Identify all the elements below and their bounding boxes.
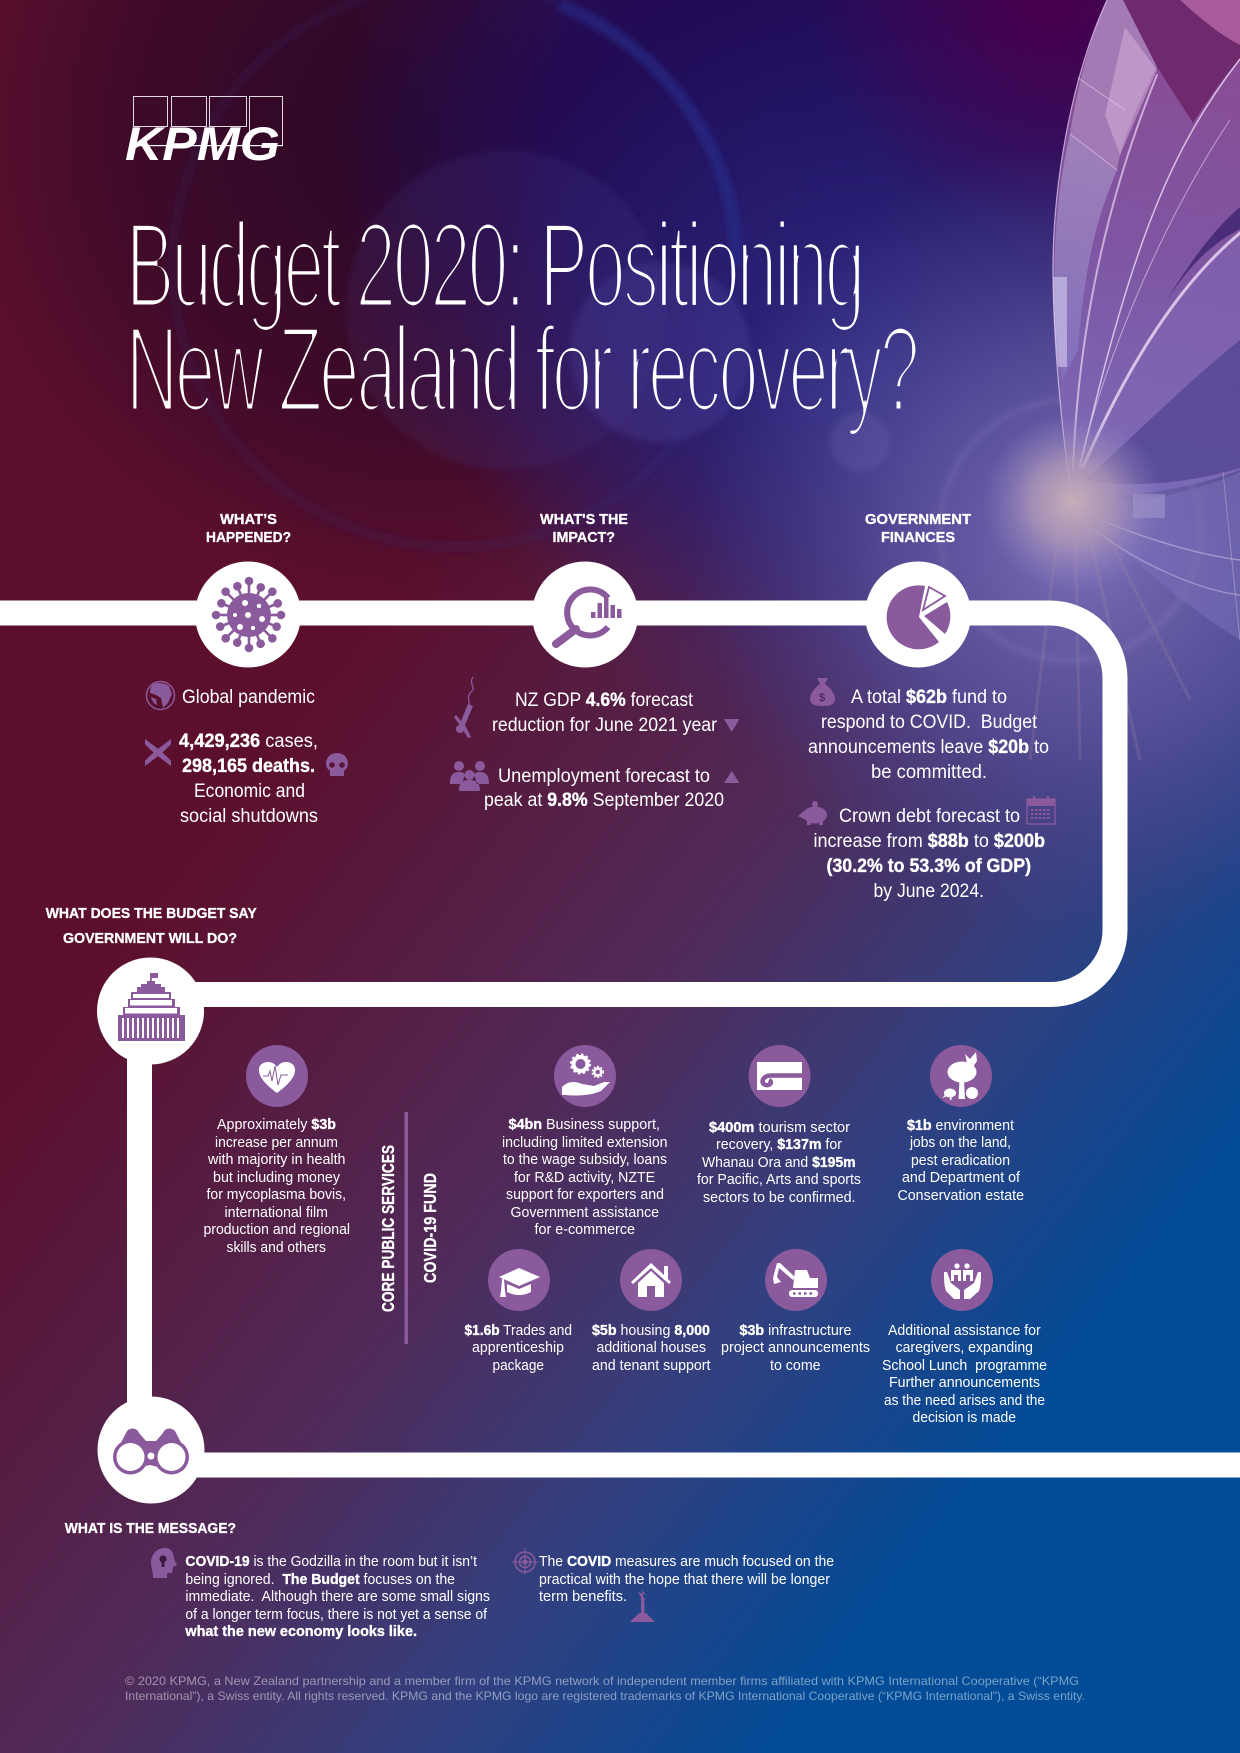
- panel: government finances: [798, 512, 1055, 902]
- item: tourism: [697, 1045, 861, 1206]
- heading: what's happened: [206, 512, 291, 546]
- title: Budget 2020: Positioning: [126, 197, 862, 333]
- item: infrastructure: [721, 1249, 870, 1374]
- text: environment: and Department of: [902, 1170, 1021, 1186]
- text: housing: and tenant support: [592, 1358, 710, 1374]
- text: trades: package: [492, 1358, 544, 1374]
- icon: binoculars: [98, 1396, 204, 1504]
- text: housing: [592, 1323, 710, 1374]
- icon: virus: [195, 562, 301, 668]
- heading: what's the impact: WHAT'S THE: [540, 512, 628, 528]
- text: health: international film: [224, 1205, 328, 1221]
- text: health: [204, 1117, 350, 1256]
- text: message left: COVID-19 is the Godzilla in the room but it isn’t: [185, 1554, 477, 1570]
- icon: beehive parliament: [97, 958, 204, 1064]
- heading: what's happened: HAPPENED?: [206, 530, 291, 546]
- heading: what's happened: WHAT’S: [220, 512, 277, 528]
- panel: what is the message: [65, 1396, 834, 1640]
- text: unemployment: peak at 9.8% September 2020: [484, 790, 724, 811]
- icon: person with flag on summit: [630, 1590, 655, 1622]
- label: core public services: CORE PUBLIC SERVICES: [378, 1145, 398, 1312]
- text: tourism: sectors to be confirmed.: [703, 1190, 856, 1206]
- panel: what does the budget say: [46, 906, 1047, 1426]
- text: message left: immediate. Although there are some small signs: [185, 1589, 490, 1605]
- text: caregivers: Additional assistance for: [888, 1323, 1041, 1339]
- panel: what's happened: [146, 512, 348, 827]
- text: caregivers: School Lunch programme: [882, 1358, 1047, 1374]
- text: business support: for e-commerce: [534, 1222, 635, 1238]
- text: message left: of a longer term focus, there is not yet a sense of: [185, 1607, 488, 1623]
- text: fund: announcements leave $20b to: [808, 737, 1049, 758]
- text: health: skills and others: [226, 1240, 326, 1256]
- text: business support: to the wage subsidy, loans: [503, 1152, 667, 1168]
- text: crown debt: (30.2% to 53.3% of GDP): [826, 856, 1031, 877]
- text: cases and deaths: social shutdowns: [180, 806, 318, 827]
- text: unemployment: [484, 766, 724, 811]
- icon: up triangle: [724, 771, 740, 783]
- icon: family in hands: [931, 1249, 993, 1311]
- title: New Zealand for recovery?: [126, 301, 917, 437]
- label: covid-19 fund: COVID-19 FUND: [420, 1173, 440, 1283]
- text: crown debt: increase from $88b to $200b: [814, 831, 1045, 852]
- text: tourism: $400m tourism sector: [709, 1120, 850, 1136]
- icon: target: [512, 1548, 538, 1575]
- footer: copyright: © 2020 KPMG, a New Zealand partnership and a member firm of the KPMG network of independent member firms affiliated with KPMG International Cooperative (“KPMG: [125, 1674, 1079, 1688]
- text: caregivers: caregivers, expanding: [896, 1340, 1033, 1356]
- text: cases and deaths: 298,165 deaths.: [182, 756, 315, 777]
- text: caregivers: as the need arises and the: [884, 1393, 1045, 1409]
- text: health: production and regional: [204, 1222, 350, 1238]
- text: health: increase per annum: [215, 1135, 338, 1151]
- text: fund: be committed.: [871, 762, 987, 783]
- panel: what's the impact: [450, 512, 740, 811]
- heading: government finances: GOVERNMENT: [865, 512, 971, 528]
- title: [126, 197, 917, 437]
- text: business support: [502, 1117, 668, 1238]
- footer: copyright: [125, 1674, 1085, 1703]
- heading: government finances: [865, 512, 971, 546]
- text: housing: $5b housing 8,000: [592, 1323, 710, 1339]
- text: health: Approximately $3b: [217, 1117, 336, 1133]
- text: infrastructure: project announcements: [721, 1340, 870, 1356]
- icon: piggy bank: [798, 801, 827, 825]
- text: health: but including money: [213, 1170, 341, 1186]
- text: housing: additional houses: [596, 1340, 706, 1356]
- text: GDP forecast: [492, 690, 718, 736]
- text: business support: Government assistance: [510, 1205, 659, 1221]
- icon: head with light bulb: [151, 1548, 177, 1578]
- heading: what does the budget say: WHAT DOES THE BUDGET SAY: [46, 906, 257, 922]
- icon: calendar: [1027, 796, 1055, 824]
- text: trades: apprenticeship: [472, 1340, 564, 1356]
- heading: what's the impact: [540, 512, 628, 546]
- text: environment: pest eradication: [911, 1153, 1010, 1169]
- image: sail shape: [983, 0, 1240, 760]
- item: housing: [592, 1249, 710, 1374]
- icon: cross: [146, 741, 170, 764]
- timeline path: [0, 613, 1240, 1465]
- text: infrastructure: [721, 1323, 870, 1374]
- icon: pie chart: [865, 562, 971, 668]
- text: message right: [539, 1554, 834, 1605]
- icon: tree, bird and kiwi: [930, 1045, 992, 1107]
- text: business support: including limited extension: [502, 1135, 668, 1151]
- icon: heart: [246, 1045, 308, 1107]
- heading: government finances: FINANCES: [881, 530, 955, 546]
- text: message right: The COVID measures are much focused on the: [539, 1554, 834, 1570]
- icon: skull: [326, 753, 348, 776]
- logo: KPMG: KPMG: [125, 117, 280, 170]
- text: trades: $1.6b Trades and: [464, 1323, 572, 1339]
- text: cases and deaths: [179, 731, 318, 827]
- text: environment: jobs on the land,: [909, 1135, 1011, 1151]
- text: cases and deaths: 4,429,236 cases,: [179, 731, 318, 752]
- text: GDP forecast: reduction for June 2021 year: [492, 715, 718, 736]
- item: business support: [502, 1045, 668, 1238]
- footer: copyright: International”), a Swiss entity. All rights reserved. KPMG and the KPMG logo are registered trademarks of KPMG International Cooperative (“KPMG International”), a Swiss entity.: [125, 1689, 1085, 1703]
- item: health: [204, 1045, 350, 1256]
- text: fund: [808, 687, 1049, 783]
- text: message left: [184, 1554, 490, 1640]
- text: message left: being ignored. The Budget focuses on the: [185, 1572, 455, 1588]
- heading: what's the impact: IMPACT?: [552, 530, 615, 546]
- text: business support: for R&D activity, NZTE: [514, 1170, 655, 1186]
- text: crown debt: Crown debt forecast to: [839, 806, 1020, 827]
- icon: house: [620, 1249, 682, 1311]
- text: tourism: Whanau Ora and $195m: [702, 1155, 855, 1171]
- text: crown debt: [814, 806, 1045, 902]
- logo: KPMG: [125, 96, 283, 170]
- item: trades: [464, 1249, 572, 1374]
- heading: what does the budget say: GOVERNMENT WILL DO?: [63, 931, 237, 947]
- text: fund: A total $62b fund to: [851, 687, 1007, 708]
- icon: tino rangatiratanga flag: [748, 1045, 810, 1107]
- text: infrastructure: to come: [770, 1358, 821, 1374]
- text: tourism: [697, 1120, 861, 1206]
- text: message right: practical with the hope that there will be longer: [539, 1572, 830, 1588]
- text: message left: what the new economy looks like.: [184, 1624, 417, 1640]
- text: cases and deaths: Economic and: [194, 781, 305, 802]
- text: infrastructure: $3b infrastructure: [740, 1323, 852, 1339]
- item: caregivers: [882, 1249, 1047, 1426]
- text: environment: $1b environment: [907, 1118, 1014, 1134]
- icon: money bag: $: [819, 692, 825, 704]
- text: tourism: for Pacific, Arts and sports: [697, 1172, 861, 1188]
- icon: down triangle: [724, 719, 740, 732]
- icon: money bag: [810, 678, 835, 706]
- heading: what is the message: WHAT IS THE MESSAGE?: [65, 1521, 236, 1537]
- text: health: for mycoplasma bovis,: [206, 1187, 346, 1203]
- text: unemployment: Unemployment forecast to: [498, 766, 710, 787]
- text: trades: [464, 1323, 572, 1374]
- text: business support: $4bn Business support,: [508, 1117, 660, 1133]
- icon: digger: [765, 1249, 827, 1311]
- text: caregivers: Further announcements: [889, 1375, 1040, 1391]
- text: health: with majority in health: [207, 1152, 346, 1168]
- item: environment: [898, 1045, 1024, 1204]
- text: caregivers: decision is made: [912, 1410, 1016, 1426]
- icon: gears in hand: [554, 1045, 616, 1107]
- icon: globe: [146, 682, 174, 710]
- text: business support: support for exporters and: [506, 1187, 664, 1203]
- text: environment: Conservation estate: [898, 1188, 1024, 1204]
- text: caregivers: [882, 1323, 1047, 1426]
- icon: people: [450, 761, 489, 791]
- text: global pandemic: Global pandemic: [182, 687, 315, 708]
- text: environment: [898, 1118, 1024, 1204]
- text: crown debt: by June 2024.: [874, 881, 984, 902]
- text: GDP forecast: NZ GDP 4.6% forecast: [515, 690, 694, 711]
- icon: bungee jumper: [454, 677, 473, 738]
- text: fund: respond to COVID. Budget: [821, 712, 1038, 733]
- icon: magnifier: [532, 562, 638, 668]
- text: message right: term benefits.: [539, 1589, 627, 1605]
- icon: graduation cap: [488, 1249, 550, 1311]
- text: tourism: recovery, $137m for: [716, 1137, 842, 1153]
- heading: what does the budget say: [46, 906, 257, 947]
